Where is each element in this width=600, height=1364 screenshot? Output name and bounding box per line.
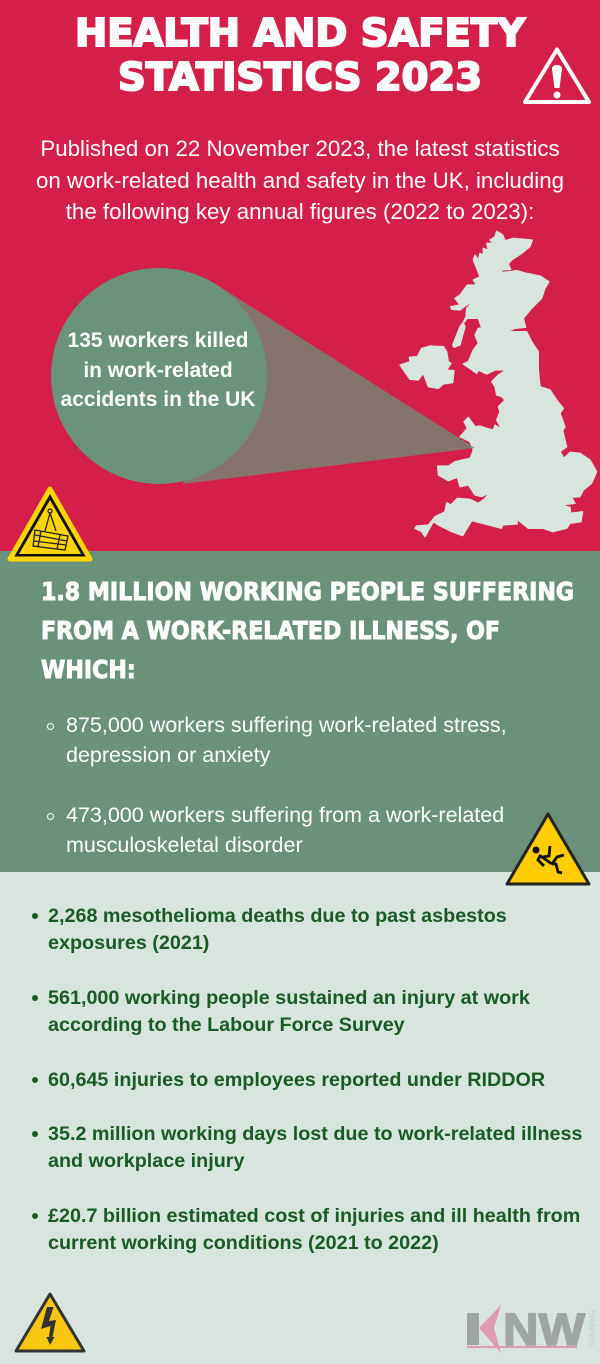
stat: RIDDOR: 60,645 injuries to employees reported under RIDDOR	[48, 1069, 545, 1091]
stat: days lost: and workplace injury	[48, 1150, 244, 1172]
stat: injuries: according to the Labour Force Survey	[48, 1014, 405, 1036]
intro text: on work-related health and safety in the UK, including	[36, 168, 564, 193]
icon: falling load warning	[10, 489, 90, 559]
list item: stress: 875,000 workers suffering work-related stress,	[66, 713, 507, 737]
callout: pointer wedge	[183, 290, 475, 484]
panel: red header	[0, 0, 600, 551]
list item: musculoskeletal	[47, 803, 504, 857]
list item: stress: depression or anxiety	[66, 743, 270, 767]
list item: stress	[47, 713, 507, 767]
icon: electrical hazard warning	[16, 1294, 84, 1351]
stat: injuries: 561,000 working people sustained an injury at work	[48, 987, 530, 1009]
stat: cost: current working conditions (2021 to 2022)	[48, 1232, 439, 1254]
callout: circle with fatality figure	[51, 268, 267, 484]
title: STATISTICS 2023	[118, 55, 482, 100]
stat: days lost	[32, 1123, 582, 1172]
stat: cost: £20.7 billion estimated cost of injuries and ill health from	[48, 1205, 580, 1227]
stat: days lost: 35.2 million working days lost due to work-related illness	[48, 1123, 582, 1145]
list item: musculoskeletal: musculoskeletal disorder	[66, 833, 303, 857]
title	[75, 11, 528, 100]
stat: mesothelioma: exposures (2021)	[48, 932, 209, 954]
title: HEALTH AND SAFETY	[75, 11, 525, 56]
heading: illness: FROM A WORK-RELATED ILLNESS, OF	[41, 616, 500, 645]
logo: KNW Training: NW	[503, 1304, 586, 1355]
logo: KNW Training: TRAINING	[588, 1310, 597, 1348]
heading: illness: 1.8 MILLION WORKING PEOPLE SUFFERING	[41, 577, 574, 606]
icon: warning exclamation	[525, 50, 589, 102]
intro text	[36, 136, 564, 224]
callout: circle with fatality figure: accidents in the UK	[61, 388, 255, 411]
callout: circle with fatality figure: in work-related	[83, 359, 233, 382]
stat: cost	[32, 1205, 580, 1254]
heading: illness	[41, 577, 574, 684]
list item: musculoskeletal: 473,000 workers suffering from a work-related	[66, 803, 504, 827]
panel: green illness section	[0, 551, 600, 872]
callout: circle with fatality figure: 135 workers killed	[68, 329, 248, 352]
icon: slip hazard warning	[507, 814, 589, 884]
panel: light statistics section	[0, 872, 600, 1364]
logo: KNW Training	[467, 1304, 597, 1355]
intro text: Published on 22 November 2023, the latest statistics	[40, 136, 560, 161]
stat: mesothelioma	[32, 905, 507, 954]
intro text: the following key annual figures (2022 to 2023):	[66, 199, 534, 224]
stat: injuries	[32, 987, 530, 1036]
map: United Kingdom	[400, 231, 597, 537]
stat: mesothelioma: 2,268 mesothelioma deaths due to past asbestos	[48, 905, 507, 927]
heading: illness: WHICH:	[41, 655, 136, 684]
